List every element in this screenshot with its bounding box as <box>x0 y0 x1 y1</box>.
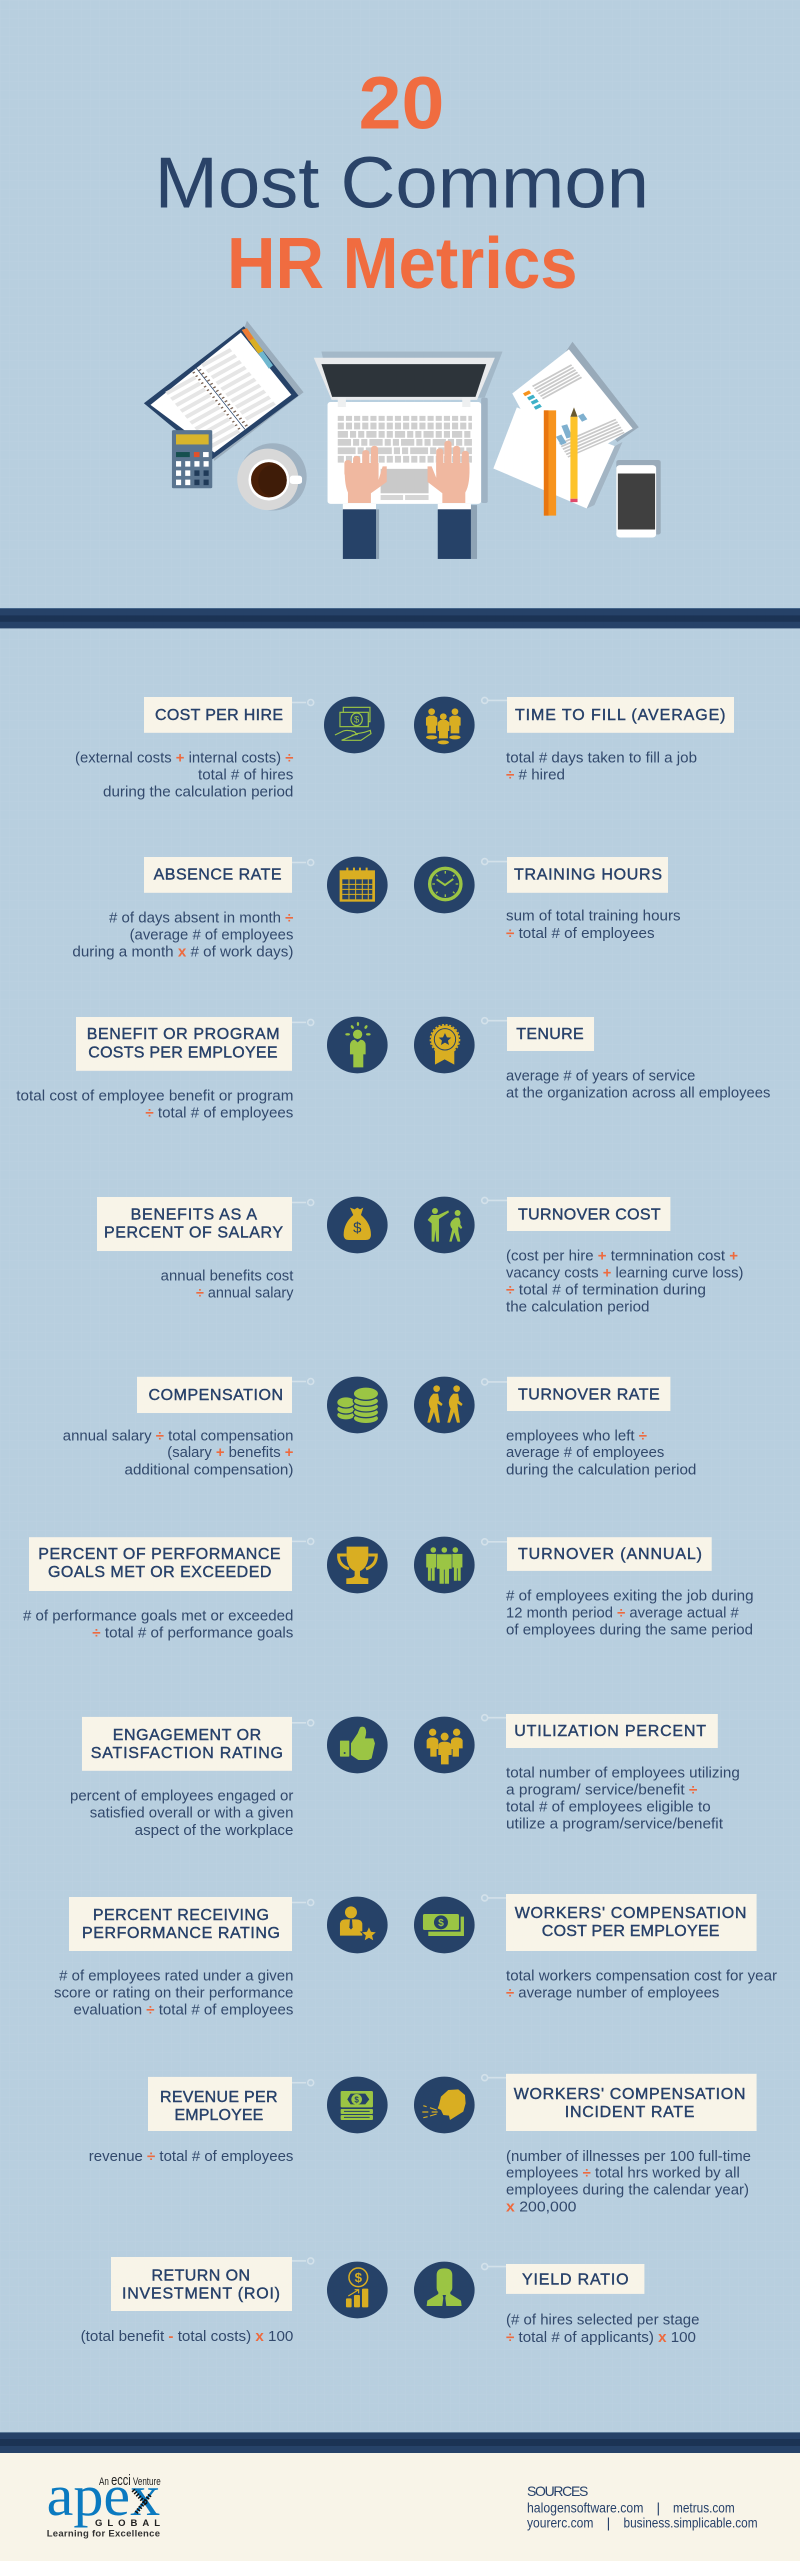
sources: | <box>607 2514 610 2530</box>
formula text <box>506 1428 696 1478</box>
heading box <box>482 1197 670 1231</box>
heading box: INCIDENT RATE <box>565 2104 694 2121</box>
formula text <box>506 1766 740 1832</box>
formula text: ÷ # hired <box>506 768 565 784</box>
desk illustration <box>144 321 661 559</box>
heading box <box>29 1537 314 1591</box>
metric: cost per hire <box>75 697 385 800</box>
formula text: utilize a program/service/benefit <box>506 1816 723 1832</box>
formula text: ÷ annual salary <box>196 1286 294 1302</box>
heading box: COST PER HIRE <box>155 707 283 724</box>
icon: award ribbon <box>414 1017 475 1073</box>
metric: yield ratio <box>414 2262 700 2346</box>
formula text: ÷ total # of employees <box>506 926 655 942</box>
icon: money bag <box>327 1197 388 1253</box>
logo: apex global: An ecci Venture <box>99 2472 161 2489</box>
formula text <box>506 751 697 784</box>
formula text: employees during the calendar year) <box>506 2183 749 2199</box>
metric: return on investment <box>81 2257 388 2345</box>
formula text: # of employees rated under a given <box>59 1969 293 1985</box>
formula text: (number of illnesses per 100 full-time <box>506 2149 751 2165</box>
icon: ruler <box>544 410 556 516</box>
icon: banknotes <box>414 1897 475 1953</box>
metric: compensation <box>63 1377 388 1478</box>
metric: absence rate <box>72 857 388 960</box>
formula text <box>506 908 681 942</box>
heading box <box>76 1017 314 1071</box>
icon: boss dismissing employee <box>414 1197 475 1253</box>
heading box: UTILIZATION PERCENT <box>514 1723 706 1740</box>
formula text: during a month x # of work days) <box>72 944 293 960</box>
metric: percent receiving performance rating <box>54 1897 388 2018</box>
heading box <box>482 2264 644 2294</box>
title: HR Metrics <box>227 224 578 304</box>
formula text: sum of total training hours <box>506 908 681 924</box>
logo: apex global: GLOBAL <box>95 2518 160 2529</box>
icon: coin stacks <box>327 1377 388 1433</box>
formula text: ÷ average number of employees <box>506 1986 719 2002</box>
sources: halogensoftware.com <box>527 2499 643 2515</box>
formula text: additional compensation) <box>124 1462 293 1478</box>
formula text: (salary + benefits + <box>167 1445 293 1461</box>
heading box: WORKERS' COMPENSATION <box>515 1905 746 1922</box>
icon: pencil <box>570 407 578 502</box>
heading box: BENEFITS AS A <box>131 1206 257 1223</box>
heading box <box>69 1897 314 1951</box>
bottom divider band <box>0 2432 800 2453</box>
icon: candidate silhouette <box>414 2262 475 2318</box>
heading box: RETURN ON <box>152 2267 250 2284</box>
formula text: evaluation ÷ total # of employees <box>74 2002 293 2018</box>
formula text: annual salary ÷ total compensation <box>63 1428 293 1444</box>
heading box: WORKERS' COMPENSATION <box>514 2086 745 2103</box>
heading box: ABSENCE RATE <box>154 866 282 883</box>
heading box: TURNOVER (ANNUAL) <box>518 1546 702 1563</box>
icon: laptop <box>314 351 503 504</box>
metric: benefit or program costs per employee <box>16 1017 388 1122</box>
formula text: # of days absent in month ÷ <box>109 911 293 927</box>
formula text <box>506 2312 700 2346</box>
title: 20 <box>359 61 444 144</box>
icon: coffee cup <box>237 443 307 511</box>
sources: metrus.com <box>673 2499 735 2515</box>
formula text: employees ÷ total hrs worked by all <box>506 2166 740 2182</box>
formula text: (external costs + internal costs) ÷ <box>75 751 293 767</box>
heading box: PERCENT OF PERFORMANCE <box>38 1546 281 1563</box>
heading box: TURNOVER RATE <box>518 1386 660 1404</box>
heading box: EMPLOYEE <box>174 2107 263 2124</box>
metric: training hours <box>414 857 681 942</box>
formula text <box>54 1969 293 2018</box>
heading box <box>111 2257 314 2311</box>
icon: employee with star <box>327 1897 388 1953</box>
metric: tenure <box>414 1017 770 1102</box>
metric: workers compensation incident rate <box>414 2074 757 2215</box>
heading box: INVESTMENT (ROI) <box>122 2285 280 2302</box>
formula text <box>63 1428 293 1478</box>
sources: | <box>656 2499 660 2515</box>
formula text: x 200,000 <box>506 2199 576 2215</box>
metric: utilization percent <box>414 1714 740 1832</box>
heading box <box>482 1714 718 1748</box>
metric: engagement or satisfaction rating <box>70 1717 388 1839</box>
heading box <box>144 697 314 733</box>
icon: dollar and growth bars: $ <box>355 2270 363 2285</box>
formula text: # of performance goals met or exceeded <box>23 1608 293 1624</box>
heading box <box>482 697 734 733</box>
heading box: BENEFIT OR PROGRAM <box>87 1026 280 1043</box>
heading box: YIELD RATIO <box>522 2271 629 2288</box>
sources <box>527 2483 758 2530</box>
icon: banknotes: $ <box>438 1918 444 1929</box>
sources: yourerc.com <box>527 2514 593 2530</box>
formula text <box>70 1789 294 1839</box>
formula text <box>23 1608 293 1641</box>
icon: phone <box>616 460 661 537</box>
heading box <box>144 857 314 893</box>
heading box: TENURE <box>516 1026 584 1043</box>
icon: calculator <box>172 430 212 488</box>
formula text: during the calculation period <box>103 784 293 800</box>
formula text: (total benefit - total costs) x 100 <box>81 2329 293 2345</box>
title <box>155 61 649 304</box>
formula text <box>75 751 293 800</box>
formula text: ÷ total # of applicants) x 100 <box>506 2330 696 2346</box>
formula text: satisfied overall or with a given <box>90 1806 293 1822</box>
formula text <box>506 1589 754 1638</box>
icon: stack of cash: $ <box>354 2095 359 2104</box>
formula text: (cost per hire + termnination cost + <box>506 1249 738 1265</box>
metric: benefits as a percent of salary <box>97 1197 388 1302</box>
formula text: a program/ service/benefit ÷ <box>506 1782 697 1798</box>
heading box: GOALS MET OR EXCEEDED <box>48 1564 271 1581</box>
icon: documents <box>493 342 639 508</box>
formula text: (# of hires selected per stage <box>506 2312 700 2328</box>
formula text <box>16 1089 293 1122</box>
formula text: total # of hires <box>198 768 293 784</box>
heading box <box>137 1377 314 1413</box>
heading box <box>82 1717 314 1771</box>
sources: SOURCES <box>527 2483 588 2499</box>
icon: money in hand <box>324 697 385 753</box>
formula text: ÷ total # of performance goals <box>92 1625 293 1641</box>
sources: business.simplicable.com <box>624 2514 758 2530</box>
icon: thumbs up <box>327 1717 388 1773</box>
formula text: total # days taken to fill a job <box>506 751 697 767</box>
icon: trophy <box>327 1537 388 1593</box>
formula text: total # of employees eligible to <box>506 1800 711 1816</box>
formula text: ÷ total # of termination during <box>506 1283 706 1299</box>
icon: team of three <box>414 697 475 753</box>
icon: money in hand: $ <box>354 715 360 725</box>
formula text: the calculation period <box>506 1300 650 1316</box>
icon: coughing head <box>414 2077 475 2133</box>
heading box: COSTS PER EMPLOYEE <box>88 1044 278 1061</box>
formula text: average # of years of service <box>506 1068 695 1084</box>
formula text: annual benefits cost <box>161 1268 293 1284</box>
heading box <box>482 2074 757 2131</box>
formula text: at the organization across all employees <box>506 1086 770 1102</box>
formula text: employees who left ÷ <box>506 1428 647 1444</box>
heading box: TURNOVER COST <box>518 1206 661 1223</box>
formula text <box>506 2149 751 2215</box>
formula text: average # of employees <box>506 1445 664 1461</box>
heading box: TIME TO FILL (AVERAGE) <box>515 707 726 724</box>
metric: turnover cost <box>414 1197 743 1316</box>
formula text: total number of employees utilizing <box>506 1766 740 1782</box>
formula text: percent of employees engaged or <box>70 1789 294 1805</box>
formula text: of employees during the same period <box>506 1622 753 1638</box>
heading box: REVENUE PER <box>160 2089 278 2106</box>
icon: money bag: $ <box>353 1219 362 1236</box>
icon: clock <box>414 857 475 913</box>
icon: hands <box>345 444 470 503</box>
formula text: score or rating on their performance <box>54 1986 293 2002</box>
icon: dollar and growth bars <box>327 2262 388 2318</box>
icon: calendar <box>327 857 388 913</box>
heading box <box>482 1017 594 1051</box>
metric: turnover annual <box>414 1537 754 1638</box>
heading box: ENGAGEMENT OR <box>113 1727 261 1744</box>
heading box: COMPENSATION <box>148 1387 283 1404</box>
heading box: SATISFACTION RATING <box>91 1745 283 1762</box>
icon: notebook <box>144 321 304 461</box>
metric: revenue per employee <box>89 2077 388 2165</box>
formula text: 12 month period ÷ average actual # <box>506 1606 739 1622</box>
formula text: during the calculation period <box>506 1462 696 1478</box>
logo: apex global: Learning for Excellence <box>47 2529 160 2540</box>
formula text <box>72 911 293 960</box>
formula text: total workers compensation cost for year <box>506 1969 777 1985</box>
formula text: # of employees exiting the job during <box>506 1589 754 1605</box>
heading box <box>97 1197 314 1251</box>
formula text: revenue ÷ total # of employees <box>89 2149 293 2165</box>
icon: sleeves <box>343 504 477 559</box>
logo: apex global: apex <box>47 2463 160 2528</box>
title: Most Common <box>155 144 649 224</box>
heading box <box>482 857 668 893</box>
formula text <box>506 1249 743 1316</box>
top divider band <box>0 608 800 628</box>
heading box <box>148 2077 314 2131</box>
icon: person with idea <box>327 1017 388 1073</box>
heading box <box>482 1377 670 1411</box>
heading box: PERCENT OF SALARY <box>104 1224 283 1242</box>
heading box: PERFORMANCE RATING <box>82 1925 280 1942</box>
formula text: (average # of employees <box>130 928 293 944</box>
icon: three people <box>414 1717 475 1773</box>
formula text: aspect of the workplace <box>135 1823 293 1839</box>
icon: people walking away <box>414 1377 475 1433</box>
heading box: PERCENT RECEIVING <box>93 1907 269 1924</box>
formula text <box>506 1068 770 1102</box>
formula text <box>506 1969 777 2002</box>
heading box <box>482 1894 757 1951</box>
metric: time to fill <box>414 697 734 784</box>
formula text <box>161 1268 294 1302</box>
footer panel <box>0 2453 800 2561</box>
heading box: COST PER EMPLOYEE <box>542 1923 719 1940</box>
metric: percent of performance goals <box>23 1537 388 1641</box>
formula text: total cost of employee benefit or program <box>16 1089 293 1105</box>
heading box <box>482 1537 712 1571</box>
heading box: TRAINING HOURS <box>514 866 662 883</box>
formula text: ÷ total # of employees <box>145 1106 293 1122</box>
icon: group of employees <box>414 1537 475 1593</box>
metric: workers compensation cost per employee <box>414 1894 777 2002</box>
metric: turnover rate <box>414 1377 696 1478</box>
formula text: vacancy costs + learning curve loss) <box>506 1266 743 1282</box>
icon: stack of cash <box>327 2077 388 2133</box>
